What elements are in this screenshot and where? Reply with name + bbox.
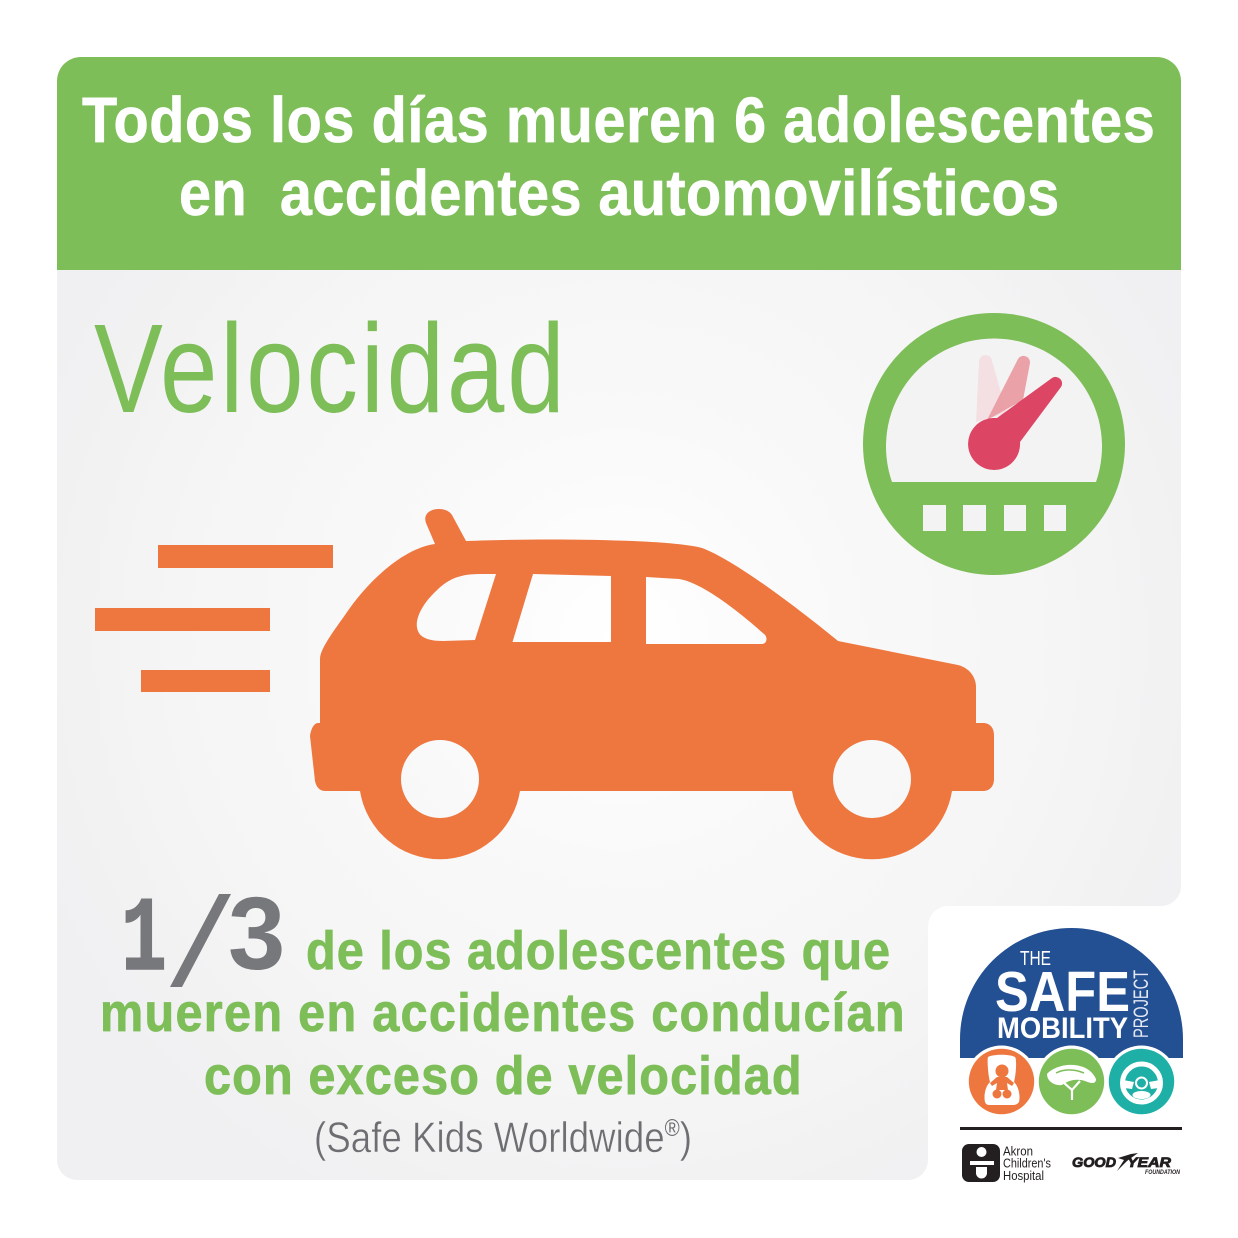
source note: ) xyxy=(680,1114,692,1162)
text block: statistic description: con exceso de velocidad xyxy=(204,1045,802,1106)
statistic: 1/3 xyxy=(121,876,285,1001)
panel: green header xyxy=(57,57,1181,270)
icon: orange car xyxy=(310,509,994,859)
text block: statistic description: mueren en accidentes conducían xyxy=(100,982,905,1043)
heading line 1: Todos los días mueren 6 adolescentes xyxy=(82,84,1155,156)
icon: steering wheel xyxy=(1109,1049,1174,1114)
logo: Goodyear Foundation: YEAR xyxy=(1127,1155,1171,1170)
text block: statistic description xyxy=(100,920,905,1106)
logo: Akron Children's Hospital: Hospital xyxy=(1003,1168,1044,1183)
icon: car seat xyxy=(969,1049,1034,1114)
logo: Goodyear Foundation xyxy=(1072,1153,1181,1176)
logo: Akron Children's Hospital: Children's xyxy=(1003,1156,1051,1170)
logo: The Safe Mobility Project xyxy=(960,928,1183,1183)
logo: Akron Children's Hospital xyxy=(962,1144,1051,1183)
heading: Velocidad: Velocidad xyxy=(94,299,565,439)
text block: statistic description: de los adolescentes que xyxy=(306,920,890,981)
logo: The Safe Mobility Project: SAFE xyxy=(995,960,1130,1024)
logo: The Safe Mobility Project: MOBILITY xyxy=(997,1012,1128,1045)
logo: Goodyear Foundation: FOUNDATION xyxy=(1145,1170,1181,1176)
logo: Goodyear Foundation: GOOD xyxy=(1072,1155,1116,1170)
statistic: 1/3: 1 xyxy=(121,881,167,1001)
statistic: 1/3: 3 xyxy=(228,876,285,991)
heading line 2: en accidentes automovilísticos xyxy=(179,157,1059,229)
panel: main background xyxy=(57,260,1181,1180)
source note: ® xyxy=(665,1115,680,1142)
logo: The Safe Mobility Project: PROJECT xyxy=(1130,970,1153,1038)
speed lines xyxy=(95,545,333,692)
logo: Akron Children's Hospital: Akron xyxy=(1003,1144,1033,1158)
logo: The Safe Mobility Project: THE xyxy=(1020,948,1051,970)
icon: speedometer xyxy=(863,313,1125,575)
source note: (Safe Kids Worldwide xyxy=(314,1114,724,1162)
icon: helmet xyxy=(1039,1049,1104,1114)
